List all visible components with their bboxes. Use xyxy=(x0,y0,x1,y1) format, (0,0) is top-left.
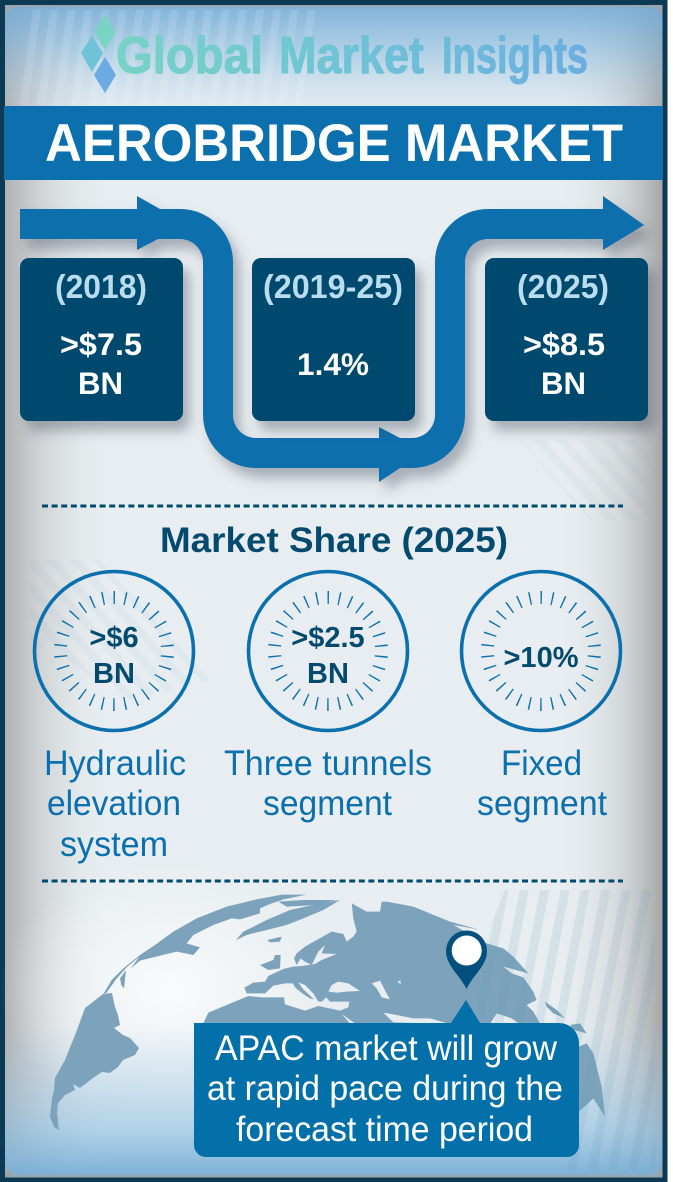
logo wordmark: Global xyxy=(116,27,263,85)
panel: 2025 value: (2025) xyxy=(517,269,609,306)
callout: forecast time period xyxy=(236,1110,533,1149)
gauge: hydraulic elevation system xyxy=(34,572,194,730)
british isles xyxy=(260,955,281,970)
globe stripes xyxy=(465,890,655,1170)
gauge: fixed segment xyxy=(462,572,620,730)
label: three tunnels segment: Three tunnels xyxy=(224,744,432,783)
north america arc xyxy=(103,895,337,994)
logo wordmark: Insights xyxy=(442,27,588,85)
icon: logo diamonds xyxy=(81,15,116,93)
panel: 2019-25 growth: 1.4% xyxy=(297,346,369,382)
southeast asia and australia xyxy=(570,1023,587,1033)
logo wordmark: Market xyxy=(279,27,424,85)
main landmass xyxy=(203,902,567,1027)
panel: 2025 value: >$8.5 xyxy=(523,326,605,362)
label: fixed segment: Fixed xyxy=(501,744,582,783)
label: three tunnels segment: segment xyxy=(263,784,392,823)
heading: market share: Market Share (2025) xyxy=(160,521,508,560)
panel: 2025 value: BN xyxy=(541,365,586,401)
gauge: hydraulic elevation system: BN xyxy=(93,658,135,690)
gauge: fixed segment: >10% xyxy=(504,642,579,674)
label: fixed segment: segment xyxy=(477,784,607,823)
panel: 2018 value xyxy=(20,258,183,421)
label: hydraulic elevation system: Hydraulic xyxy=(44,744,186,783)
label: hydraulic elevation system: system xyxy=(60,825,168,864)
panel: 2018 value: (2018) xyxy=(55,269,147,306)
callout: APAC market will grow xyxy=(215,1029,558,1068)
panel: 2018 value: >$7.5 xyxy=(60,326,142,362)
south america xyxy=(50,993,139,1130)
iceland xyxy=(267,937,282,942)
label: hydraulic elevation system xyxy=(44,744,186,864)
label: hydraulic elevation system: elevation xyxy=(47,784,181,823)
panel: 2019-25 growth xyxy=(252,258,415,421)
callout: at rapid pace during the xyxy=(207,1069,563,1108)
panel: 2019-25 growth: (2019-25) xyxy=(263,269,403,306)
icon: location pin xyxy=(446,930,487,989)
logo xyxy=(81,15,588,93)
label: three tunnels segment xyxy=(224,744,432,823)
greenland xyxy=(236,900,340,940)
callout xyxy=(194,1000,579,1157)
gauge: three tunnels segment xyxy=(248,572,408,730)
gauge: three tunnels segment: BN xyxy=(307,658,349,690)
label: fixed segment xyxy=(477,744,607,823)
eurasia, africa and islands xyxy=(203,900,605,1117)
japan xyxy=(545,1002,565,1018)
gauge: three tunnels segment: >$2.5 xyxy=(291,622,365,654)
logo wordmark xyxy=(116,27,588,85)
panel: 2018 value: BN xyxy=(78,365,123,401)
gauge: hydraulic elevation system: >$6 xyxy=(89,622,139,654)
globe map xyxy=(50,895,605,1130)
flow arrow xyxy=(20,196,644,482)
panel: 2025 value xyxy=(485,258,648,421)
title banner: AEROBRIDGE MARKET xyxy=(45,114,623,173)
